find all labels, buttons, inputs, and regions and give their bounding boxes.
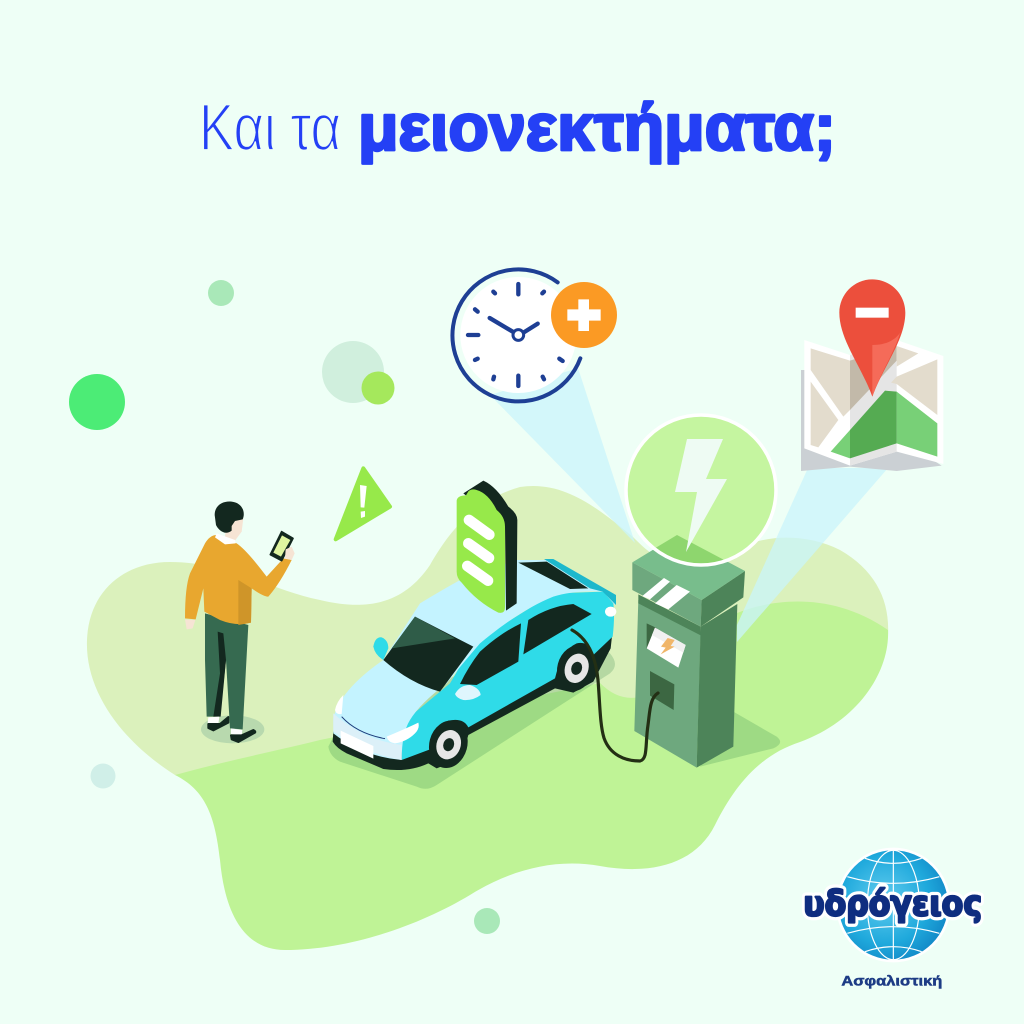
mirror xyxy=(373,637,388,660)
wheels xyxy=(424,716,473,772)
icon: map with pin xyxy=(801,279,943,471)
car xyxy=(328,559,616,789)
decorative circles xyxy=(69,280,500,934)
person with phone xyxy=(185,502,295,743)
station body xyxy=(634,600,701,768)
charging station xyxy=(632,535,780,768)
car shadow xyxy=(328,627,615,789)
logo wordmark: υδρόγειος xyxy=(803,884,982,924)
pin xyxy=(839,279,905,397)
station cap xyxy=(632,562,702,627)
car body side xyxy=(402,592,614,760)
display xyxy=(647,623,657,649)
car rear trim xyxy=(544,559,616,605)
rear window xyxy=(518,562,588,589)
background blob: light green xyxy=(87,486,888,800)
icon: warning triangle xyxy=(336,468,390,539)
logo tagline: Ασφαλιστική xyxy=(841,973,942,988)
plus badge xyxy=(551,282,617,348)
headlights and plate xyxy=(333,713,402,760)
light beam: clock to station xyxy=(490,368,635,543)
stripes xyxy=(642,578,690,609)
icon: clock with plus xyxy=(452,269,617,401)
car hood and roof xyxy=(333,560,616,760)
background blob: bright green ground xyxy=(175,602,888,950)
title: μειονεκτήματα; xyxy=(358,90,836,164)
logo xyxy=(803,848,982,988)
windshield xyxy=(383,617,473,692)
title: Και τα xyxy=(199,90,341,164)
globe xyxy=(836,848,951,962)
light beam: map to station xyxy=(737,468,888,642)
side windows xyxy=(460,604,592,685)
charging cable xyxy=(572,630,658,761)
icon: battery xyxy=(457,481,517,613)
car underbody xyxy=(333,603,613,770)
socket xyxy=(650,671,674,710)
station shadow xyxy=(700,712,780,767)
logo: υδρόγειος xyxy=(803,884,982,924)
energy circle with bolt xyxy=(624,414,778,567)
